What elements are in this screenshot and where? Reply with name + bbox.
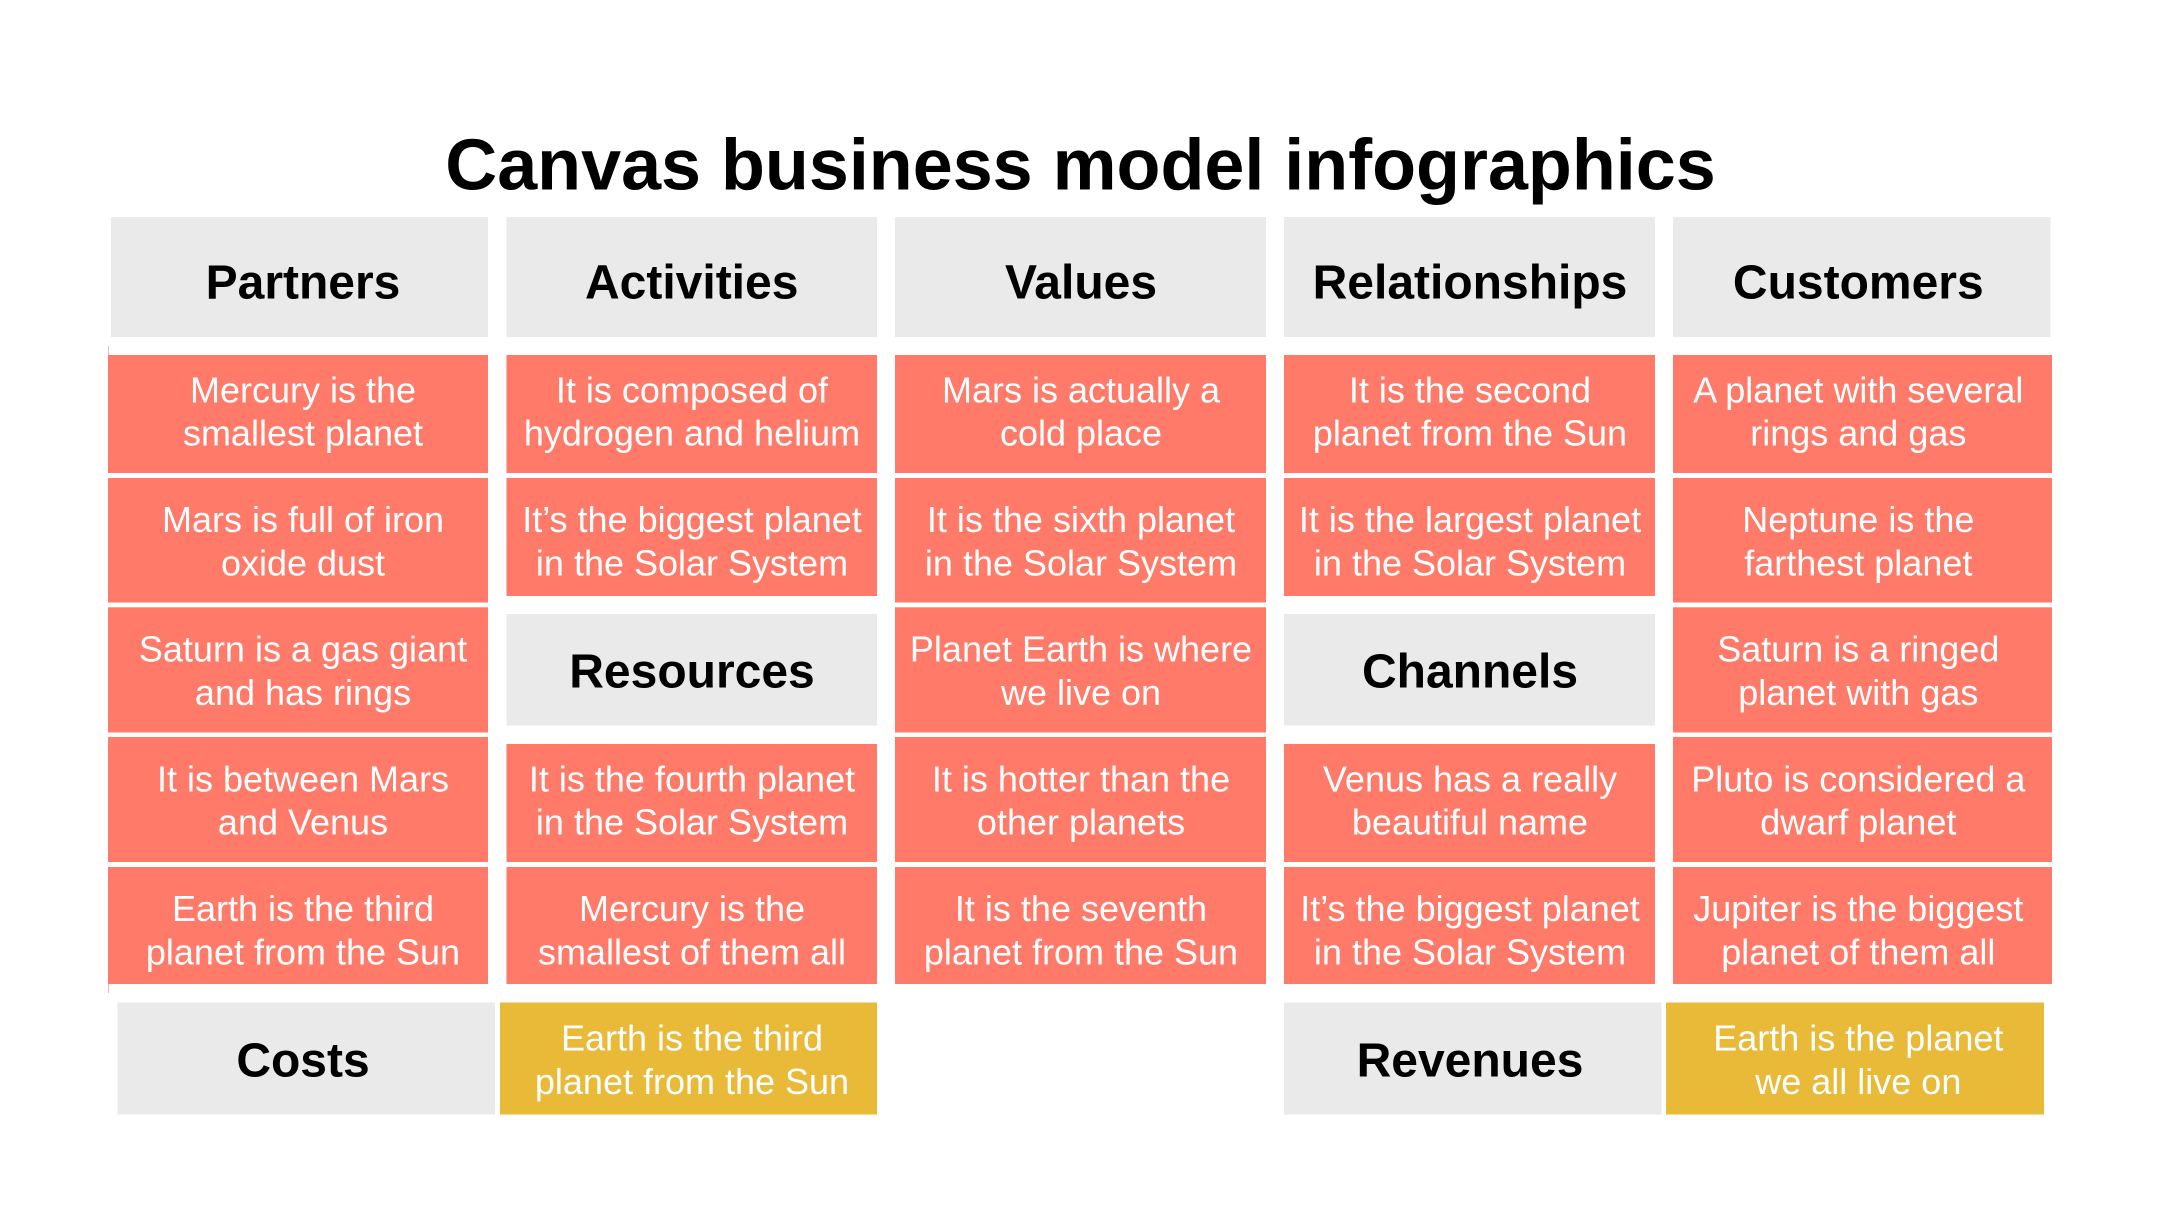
card: relationships 2: It is the largest planet [1299,499,1641,540]
card: resources 2: smallest of them all [538,931,846,972]
card: customers 1: rings and gas [1750,413,1966,454]
card: customers 1: A planet with several [1693,369,2023,410]
panel: values column [895,217,1266,984]
card: resources 2 [506,867,877,984]
card: revenues detail: Earth is the planet [1713,1018,2003,1059]
panel: revenues [1284,1002,2044,1114]
card: partners 1: smallest planet [183,413,423,454]
card: channels 1: beautiful name [1352,802,1588,843]
heading: Relationships: Relationships [1313,256,1627,309]
card: values 2 [895,478,1266,602]
card: activities 2 [506,478,877,596]
card: channels 2: It’s the biggest planet [1300,888,1640,929]
card: partners 4: and Venus [218,802,388,843]
card: revenues detail: we all live on [1754,1061,1961,1102]
panel: costs [118,1002,877,1114]
card: channels 1: Venus has a really [1323,758,1617,799]
card: partners 5 [108,867,488,984]
heading: Resources: Resources [569,645,815,698]
card: channels 2: in the Solar System [1314,931,1626,972]
card: values 3: Planet Earth is where [910,629,1252,670]
card: partners 1: Mercury is the [190,369,416,410]
card: activities 2: It’s the biggest planet [522,499,862,540]
card: partners 5: Earth is the third [172,888,434,929]
faint edge tick top [108,346,109,355]
card: resources 1: It is the fourth planet [529,758,855,799]
card: partners 2: Mars is full of iron [162,499,444,540]
panel: partners column [108,217,488,984]
card: customers 3: planet with gas [1738,672,1978,713]
heading: Activities [506,217,877,337]
card: values 5 [895,867,1266,984]
card: activities 1 [506,355,877,473]
card: values 4: other planets [977,802,1185,843]
panel: activities and resources column [506,217,877,984]
card: relationships 2 [1284,478,1655,596]
card: customers 4: dwarf planet [1760,802,1956,843]
card: customers 3: Saturn is a ringed [1717,629,1999,670]
heading: Partners [111,217,488,337]
title: Canvas business model infographics [445,125,1716,205]
card: values 1: Mars is actually a [942,369,1221,410]
panel: customers column [1673,217,2052,984]
card: customers 4 [1673,737,2052,862]
card: partners 4 [108,737,488,862]
heading: Revenues [1284,1002,1662,1114]
card: values 3: we live on [1000,672,1161,713]
card: activities 1: It is composed of [556,369,829,410]
heading: Values [895,217,1266,337]
card: partners 4: It is between Mars [157,758,449,799]
card: values 1: cold place [1000,413,1162,454]
card: customers 4: Pluto is considered a [1691,758,2026,799]
heading: Costs: Costs [236,1035,370,1088]
card: costs detail: planet from the Sun [535,1061,849,1102]
card: costs detail: Earth is the third [561,1018,823,1059]
card: revenues detail [1666,1002,2044,1114]
heading: Values: Values [1005,256,1157,309]
card: relationships 1: It is the second [1349,369,1591,410]
card: values 4: It is hotter than the [932,758,1230,799]
card: customers 2: Neptune is the [1742,499,1974,540]
card: values 5: It is the seventh [955,888,1207,929]
heading: Resources [506,614,877,726]
card: values 3 [895,607,1266,732]
card: partners 3: and has rings [195,672,411,713]
faint edge tick bottom [108,984,109,993]
card: resources 1: in the Solar System [536,802,848,843]
heading: Partners: Partners [206,256,400,309]
card: customers 3 [1673,607,2052,732]
heading: Channels: Channels [1362,645,1578,698]
card: values 4 [895,737,1266,862]
card: partners 3: Saturn is a gas giant [139,629,467,670]
panel: relationships and channels column [1284,217,1655,984]
heading: Relationships [1284,217,1655,337]
card: channels 2 [1284,867,1655,984]
heading: Revenues: Revenues [1357,1035,1583,1088]
card: costs detail [500,1002,877,1114]
heading: Customers [1673,217,2050,337]
card: customers 2 [1673,478,2052,602]
card: partners 2 [108,478,488,602]
card: resources 1 [506,744,877,862]
card: relationships 2: in the Solar System [1314,542,1626,583]
card: resources 2: Mercury is the [579,888,805,929]
card: customers 1 [1673,355,2052,473]
card: values 1 [895,355,1266,473]
card: activities 2: in the Solar System [536,542,848,583]
heading: Channels [1284,614,1655,726]
card: customers 2: farthest planet [1744,542,1972,583]
card: relationships 1 [1284,355,1655,473]
card: partners 3 [108,607,488,732]
card: customers 5 [1673,867,2052,984]
heading: Costs [118,1002,495,1114]
heading: Customers: Customers [1733,256,1984,309]
card: customers 5: Jupiter is the biggest [1693,888,2023,929]
card: activities 1: hydrogen and helium [524,413,860,454]
card: relationships 1: planet from the Sun [1313,413,1627,454]
card: channels 1 [1284,744,1655,862]
card: partners 2: oxide dust [221,542,385,583]
card: partners 1 [108,355,488,473]
heading: Activities: Activities [585,256,798,309]
card: customers 5: planet of them all [1721,931,1995,972]
card: values 2: in the Solar System [925,542,1237,583]
card: values 2: It is the sixth planet [927,499,1235,540]
card: partners 5: planet from the Sun [146,931,460,972]
card: values 5: planet from the Sun [924,931,1238,972]
